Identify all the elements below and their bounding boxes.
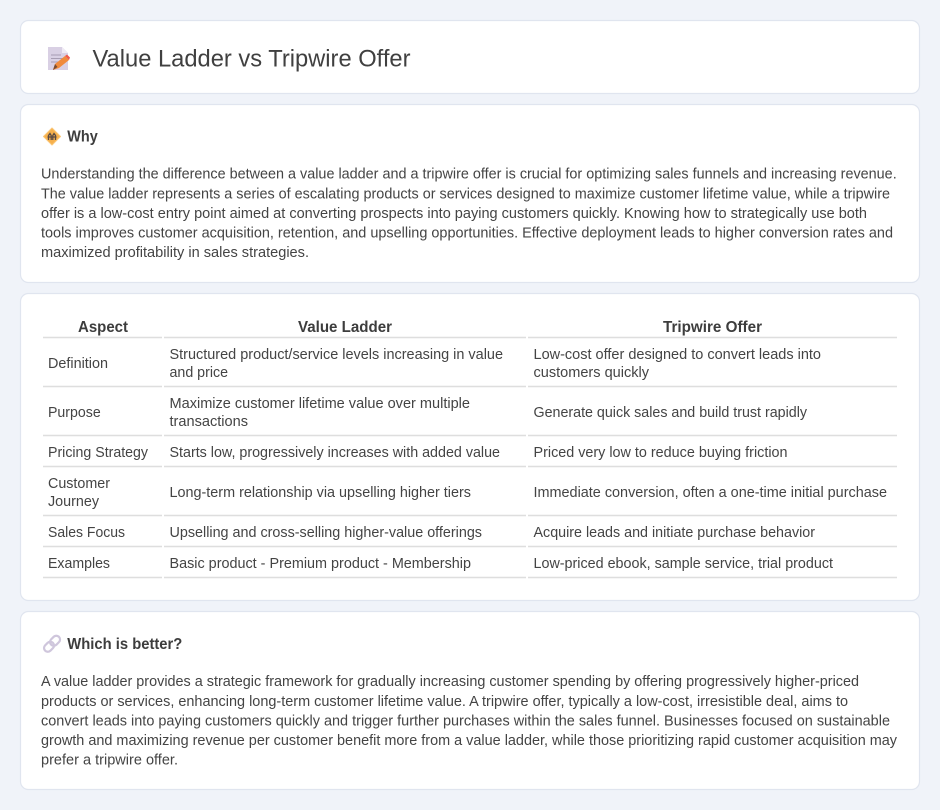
panel: which is better xyxy=(20,612,920,790)
row: customer journey: Immediate conversion, often a one-time initial purchase xyxy=(534,485,887,501)
text block: why explanation: Understanding the difference between a value ladder and a tripwire offer is crucial for optimizing sales funnels and increasing revenue. xyxy=(41,166,897,182)
row: sales focus: Acquire leads and initiate purchase behavior xyxy=(534,525,815,541)
text block: verdict xyxy=(41,674,898,768)
icon: chain link xyxy=(42,634,62,653)
row: pricing strategy xyxy=(48,445,788,461)
row: purpose xyxy=(48,396,808,430)
text block: why explanation: offer is a low-cost entry point aimed at converting prospects into paying customers quickly. Knowing how to strategically use both xyxy=(41,206,867,222)
text block: why explanation: maximized profitability in sales strategies. xyxy=(41,245,309,261)
row: purpose: Generate quick sales and build trust rapidly xyxy=(534,405,808,421)
panel: header xyxy=(20,20,920,94)
row: customer journey xyxy=(48,476,887,510)
icon: warning diamond xyxy=(44,128,60,145)
table header row xyxy=(78,319,762,336)
row: pricing strategy: Priced very low to reduce buying friction xyxy=(534,445,788,461)
row: examples xyxy=(48,556,833,572)
row: customer journey: Long-term relationship via upselling higher tiers xyxy=(170,485,471,501)
row: pricing strategy: Starts low, progressively increases with added value xyxy=(170,445,500,461)
text block: verdict: products or services, enhancing long-term customer lifetime value. A tripwire offer, typically a low-cost, irresistible deal, aims to xyxy=(41,694,848,710)
row: customer journey: Journey xyxy=(48,494,100,510)
row: definition: Definition xyxy=(48,356,108,372)
row: sales focus: Upselling and cross-selling higher-value offerings xyxy=(170,525,482,541)
text block: verdict: convert leads into paying customers quickly and trigger further purchases within the sales funnel. Businesses focused on sustainable xyxy=(41,714,890,730)
heading: which is better: Which is better? xyxy=(67,636,182,653)
text block: verdict: A value ladder provides a strategic framework for gradually increasing customer spending by offering progressively higher-priced xyxy=(41,674,859,690)
row: purpose: Purpose xyxy=(48,405,101,421)
text block: verdict: prefer a tripwire offer. xyxy=(41,752,178,768)
row: sales focus xyxy=(48,525,815,541)
row: definition xyxy=(48,347,821,381)
panel: why xyxy=(20,104,920,282)
row: pricing strategy: Pricing Strategy xyxy=(48,445,149,461)
table header row: Aspect xyxy=(78,319,129,336)
row: examples: Basic product - Premium product - Membership xyxy=(170,556,471,572)
row: definition: Structured product/service levels increasing in value xyxy=(170,347,503,363)
row: definition: customers quickly xyxy=(534,365,650,381)
row: definition: Low-cost offer designed to convert leads into xyxy=(534,347,821,363)
text block: verdict: growth and maximizing revenue per customer benefit more from a value ladder, while those prioritizing rapid customer acquisition may xyxy=(41,733,898,749)
panel: comparison table xyxy=(20,294,920,600)
text block: why explanation: tools improves customer acquisition, retention, and upselling opportunities. Effective deployment leads to higher conversion rates and xyxy=(41,226,893,242)
row: definition: and price xyxy=(170,365,228,381)
text block: why explanation: The value ladder represents a series of escalating products or services designed to maximize customer lifetime value, while a tripwire xyxy=(41,186,890,202)
row: examples: Low-priced ebook, sample service, trial product xyxy=(534,556,833,572)
heading: why: Why xyxy=(67,129,98,146)
row: sales focus: Sales Focus xyxy=(48,525,125,541)
row: purpose: transactions xyxy=(170,414,248,430)
table header row: Value Ladder xyxy=(298,319,392,336)
table header row: Tripwire Offer xyxy=(663,319,762,336)
icon: document with pencil xyxy=(48,47,70,70)
row: customer journey: Customer xyxy=(48,476,110,492)
text block: why explanation xyxy=(41,166,897,261)
row: examples: Examples xyxy=(48,556,110,572)
row: purpose: Maximize customer lifetime value over multiple xyxy=(170,396,470,412)
title: Value Ladder vs Tripwire Offer xyxy=(92,46,410,73)
